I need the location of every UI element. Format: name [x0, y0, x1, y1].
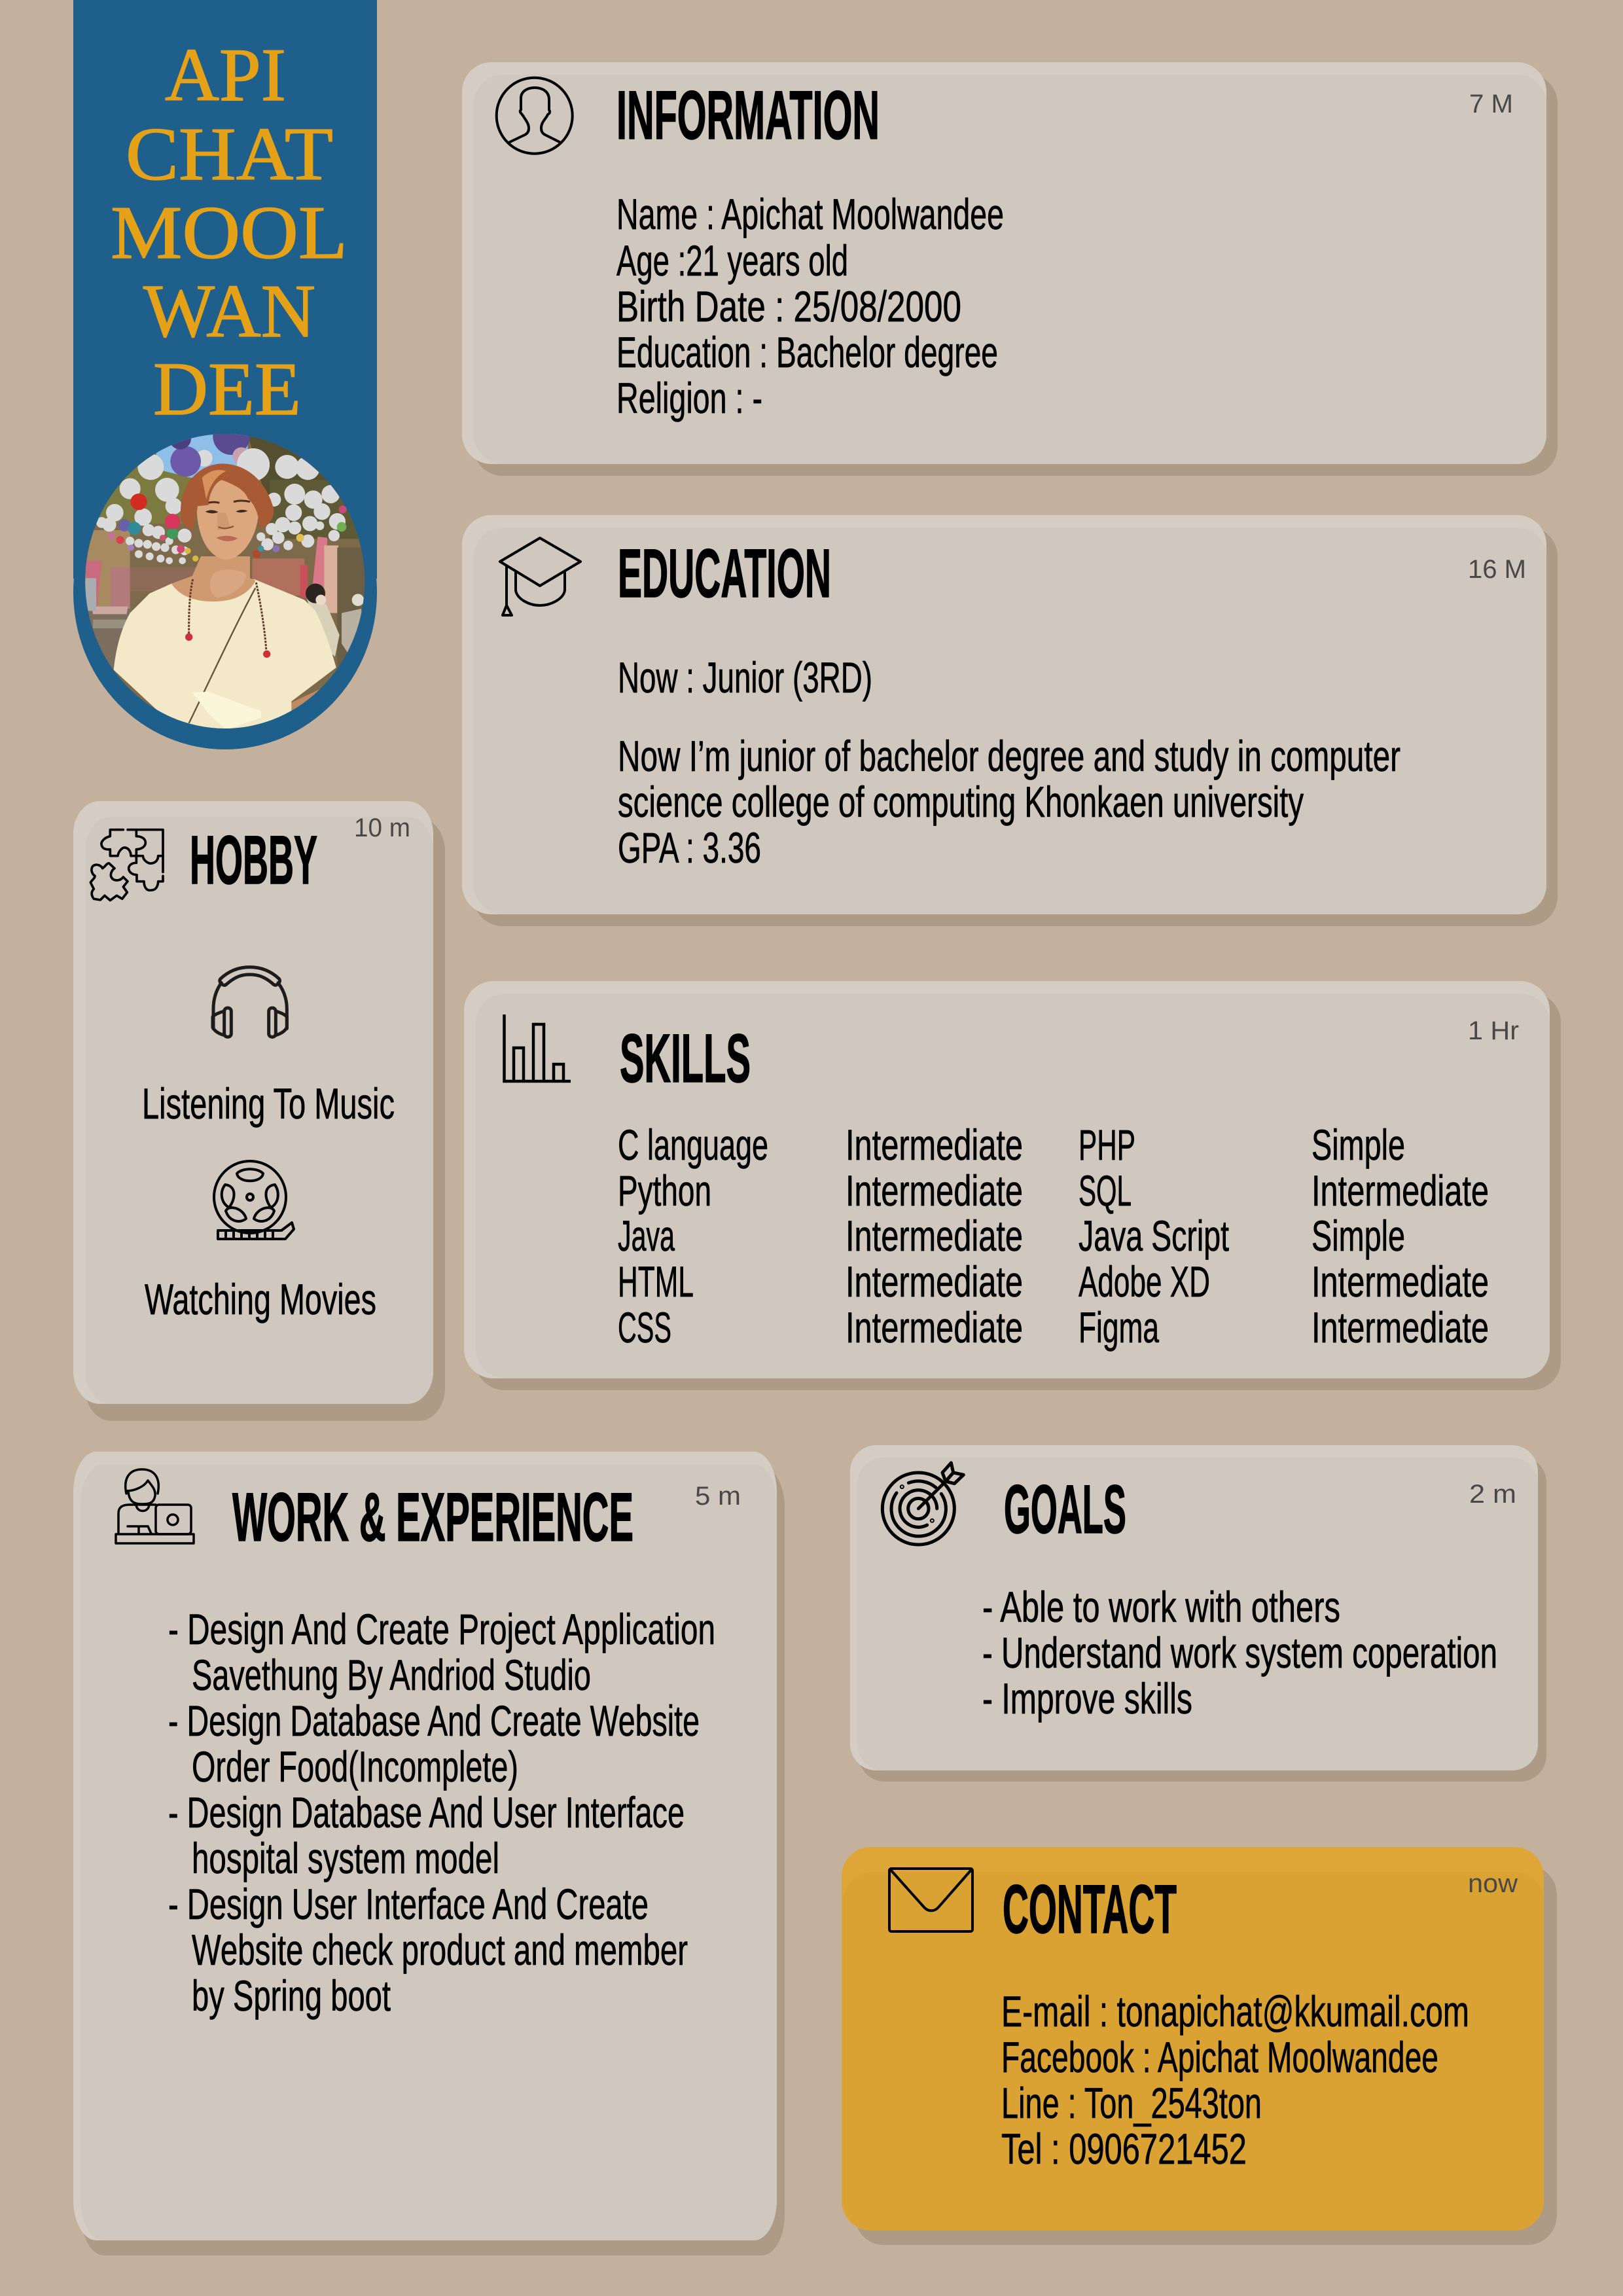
icon: headphones	[213, 967, 287, 1037]
education details: GPA : 3.36	[618, 823, 761, 872]
information details: Birth Date : 25/08/2000	[616, 282, 961, 331]
skills column 1: HTML	[618, 1257, 694, 1306]
skills column 3: Adobe XD	[1079, 1257, 1210, 1306]
name title	[111, 33, 348, 431]
skills column 3	[1079, 1121, 1229, 1352]
experience list: - Design User Interface And Create	[168, 1880, 649, 1928]
experience list: Savethung By Andriod Studio	[192, 1651, 591, 1699]
time label: 7 M	[1469, 90, 1513, 118]
contact details: Facebook : Apichat Moolwandee	[1001, 2033, 1438, 2081]
mask	[192, 692, 261, 730]
experience list: - Design Database And User Interface	[168, 1788, 685, 1837]
skills column 4: Simple	[1311, 1211, 1405, 1260]
skills column 2: Intermediate	[846, 1257, 1023, 1306]
skills column 2: Intermediate	[846, 1211, 1023, 1260]
heading: work and experience: WORK & EXPERIENCE	[232, 1479, 633, 1556]
panel: hobby	[73, 801, 445, 1421]
icon: puzzle	[90, 830, 163, 901]
name title: MOOL	[111, 191, 348, 274]
contact details	[1001, 1987, 1469, 2173]
name title: API	[165, 33, 286, 117]
skills column 3: PHP	[1079, 1121, 1135, 1169]
skills column 3: Figma	[1079, 1303, 1159, 1352]
experience list: - Design Database And Create Website	[168, 1696, 700, 1745]
name title: CHAT	[126, 113, 333, 196]
experience list: Order Food(Incomplete)	[192, 1742, 518, 1791]
experience list: Website check product and member	[192, 1926, 688, 1974]
name title: WAN	[143, 270, 315, 353]
heading: hobby: HOBBY	[190, 822, 317, 899]
face	[196, 480, 259, 560]
name banner	[73, 0, 381, 749]
skills column 4: Intermediate	[1311, 1257, 1489, 1306]
panel: education	[462, 515, 1558, 926]
goals list: - Improve skills	[982, 1674, 1192, 1723]
hair	[181, 463, 274, 530]
heading: information: INFORMATION	[616, 77, 880, 154]
information details: Name : Apichat Moolwandee	[616, 190, 1004, 238]
experience list: - Design And Create Project Application	[168, 1605, 715, 1653]
skills column 2	[846, 1121, 1023, 1352]
name title: DEE	[153, 348, 301, 431]
skills column 2: Intermediate	[846, 1303, 1023, 1352]
necklace and strap	[189, 579, 266, 653]
time label: 2 m	[1469, 1480, 1516, 1509]
arm	[291, 689, 321, 711]
education details: Now : Junior (3RD)	[618, 653, 872, 702]
heading: education: EDUCATION	[618, 535, 831, 612]
information details: Education : Bachelor degree	[616, 328, 998, 376]
information details: Religion : -	[616, 374, 762, 422]
skills column 2: Intermediate	[846, 1166, 1023, 1215]
time label: 10 m	[354, 814, 410, 842]
skills column 1: CSS	[618, 1303, 671, 1352]
skills column 3: Java Script	[1079, 1211, 1229, 1260]
heading: contact: CONTACT	[1003, 1871, 1177, 1948]
icon: film reel	[214, 1161, 294, 1239]
icon: envelope	[889, 1869, 972, 1931]
icon: person at laptop	[116, 1469, 194, 1543]
skills column 1: Python	[618, 1166, 711, 1215]
skills column 1: Java	[618, 1211, 675, 1260]
information details	[616, 190, 1004, 422]
skills column 4: Intermediate	[1311, 1303, 1489, 1352]
experience list: hospital system model	[192, 1834, 499, 1882]
contact details: Line : Ton_2543ton	[1001, 2079, 1262, 2127]
time label: now	[1468, 1869, 1518, 1898]
heading: skills: SKILLS	[620, 1020, 751, 1097]
icon: graduation cap	[500, 538, 580, 615]
information details: Age :21 years old	[616, 236, 848, 285]
skills column 3: SQL	[1079, 1166, 1132, 1215]
goals list	[982, 1583, 1497, 1723]
time label: 5 m	[695, 1482, 741, 1511]
panel: work and experience	[73, 1452, 785, 2255]
skills column 1	[618, 1121, 768, 1352]
shirt	[114, 578, 336, 731]
icon: user	[497, 78, 573, 154]
panel: skills	[464, 981, 1561, 1390]
neck	[171, 556, 255, 601]
skills column 1: C language	[618, 1121, 768, 1169]
portrait photo	[85, 434, 365, 728]
skills column 4: Intermediate	[1311, 1166, 1489, 1215]
skills column 4: Simple	[1311, 1121, 1405, 1169]
experience list: by Spring boot	[192, 1971, 391, 2020]
time label: 1 Hr	[1468, 1016, 1519, 1045]
skills column 2: Intermediate	[846, 1121, 1023, 1169]
heading: goals: GOALS	[1004, 1471, 1126, 1548]
icon: bar chart	[504, 1014, 571, 1081]
education details	[618, 653, 1400, 872]
experience list	[168, 1605, 715, 2020]
panel: information	[462, 62, 1558, 476]
time label: 16 M	[1468, 555, 1526, 584]
hobby item: music: Listening To Music	[142, 1079, 395, 1128]
contact details: Tel : 0906721452	[1001, 2125, 1247, 2173]
panel: goals	[850, 1445, 1546, 1782]
icon: target	[882, 1463, 963, 1545]
goals list: - Able to work with others	[982, 1583, 1340, 1631]
hobby item: movies: Watching Movies	[145, 1275, 376, 1323]
education details: science college of computing Khonkaen university	[618, 778, 1304, 826]
panel: contact	[842, 1847, 1557, 2245]
skills column 4	[1311, 1121, 1489, 1352]
